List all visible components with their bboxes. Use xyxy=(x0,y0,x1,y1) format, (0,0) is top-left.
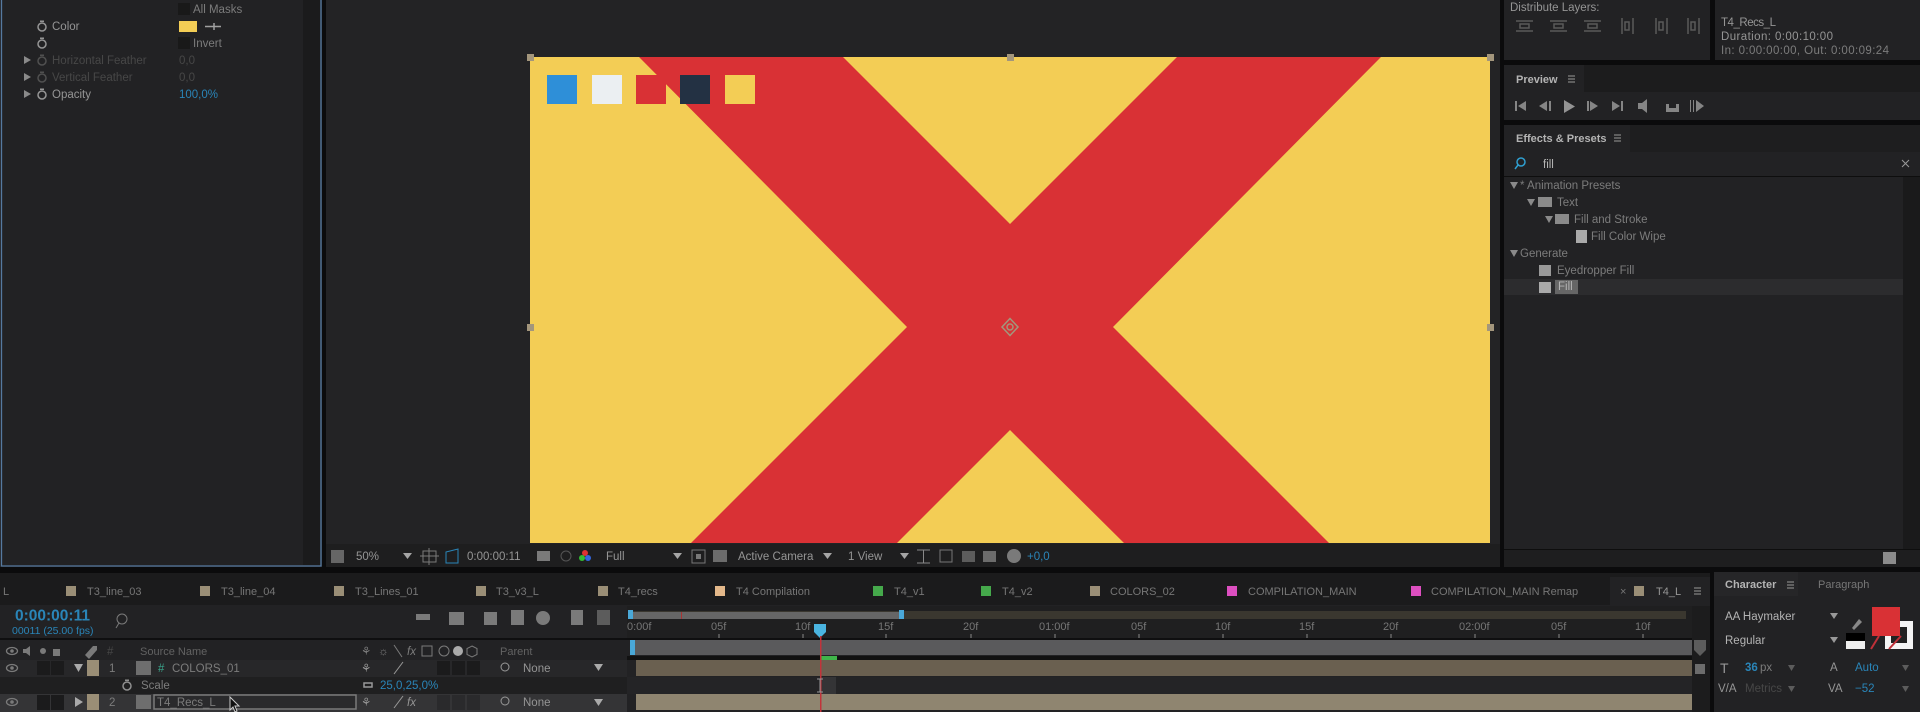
all masks checkbox: All Masks xyxy=(193,4,242,16)
mouse cursor xyxy=(230,697,239,712)
color property: Color xyxy=(52,21,80,33)
viewer toolbar: Full xyxy=(606,551,625,563)
panel: effect controls xyxy=(0,0,322,567)
character metrics: VA xyxy=(1828,683,1843,695)
colour chips xyxy=(1846,607,1913,649)
font selectors: Regular xyxy=(1725,635,1765,647)
scale property row: Scale xyxy=(141,680,170,692)
panel: preview: Preview xyxy=(1516,74,1558,86)
search field xyxy=(1515,158,1909,171)
composition tabs xyxy=(0,573,1710,605)
selection handles xyxy=(527,54,1494,331)
anchor point xyxy=(1002,318,1018,336)
invert checkbox: Invert xyxy=(193,38,223,50)
ruler and navigator: 15f xyxy=(878,621,894,633)
column header: Source Name xyxy=(140,646,207,658)
composition tabs: T3_v3_L xyxy=(496,586,539,598)
vertical feather: Vertical Feather xyxy=(52,72,133,84)
ruler and navigator: 01:00f xyxy=(1039,621,1071,633)
column header: Parent xyxy=(500,646,532,658)
scale property row xyxy=(0,677,1692,694)
current time readout: 0:00:00:11 xyxy=(15,608,90,624)
ruler and navigator: 10f xyxy=(1635,621,1651,633)
composition tabs: T3_line_03 xyxy=(87,586,141,598)
character metrics xyxy=(1718,660,1909,695)
composition tabs: COMPILATION_MAIN xyxy=(1248,586,1357,598)
layer 1 row: # xyxy=(158,663,165,675)
panel: info: T4_Recs_L xyxy=(1721,17,1777,29)
column header xyxy=(0,638,627,659)
column header: # xyxy=(107,646,114,658)
ruler and navigator: 05f xyxy=(1551,621,1567,633)
preset tree: Fill and Stroke xyxy=(1574,214,1648,226)
opacity: Opacity xyxy=(52,89,91,101)
panel: info xyxy=(1715,0,1920,60)
font selectors xyxy=(1725,611,1862,647)
current time readout xyxy=(12,608,127,637)
resize grip xyxy=(1883,552,1896,564)
horizontal feather: 0,0 xyxy=(179,55,195,67)
ruler and navigator: 20f xyxy=(1383,621,1399,633)
panel: info: Duration: 0:00:10:00 xyxy=(1721,31,1833,43)
layer 2 row: T4_Recs_L xyxy=(157,697,216,709)
layer 1 row xyxy=(0,656,1692,677)
invert checkbox xyxy=(38,37,223,50)
preset tree: Text xyxy=(1557,197,1579,209)
panel: info: In: 0:00:00:00, Out: 0:00:09:24 xyxy=(1721,45,1890,57)
character metrics: −52 xyxy=(1855,683,1875,695)
ruler and navigator xyxy=(627,606,1692,660)
composition tabs: T3_Lines_01 xyxy=(355,586,419,598)
composition tabs: T4_recs xyxy=(618,586,658,598)
panel: character xyxy=(1714,572,1920,712)
composition tabs: T4_v1 xyxy=(894,586,925,598)
character metrics: Auto xyxy=(1855,662,1879,674)
character metrics: V/A xyxy=(1718,683,1737,695)
layer 2 row: fx xyxy=(407,697,417,709)
opacity xyxy=(24,88,218,101)
composition tabs: T3_line_04 xyxy=(221,586,275,598)
composition tabs: L xyxy=(3,586,9,598)
scale property row: 25,0,25,0% xyxy=(380,680,438,692)
panel: composition viewer xyxy=(326,0,1500,567)
preset tree: Fill xyxy=(1558,281,1573,293)
viewer toolbar: +0,0 xyxy=(1027,551,1050,563)
layer 1 row: None xyxy=(523,663,550,675)
column header: ☼ xyxy=(378,646,389,658)
character metrics: Metrics xyxy=(1745,683,1782,695)
viewer toolbar xyxy=(326,544,1500,567)
composition tabs: T4 Compilation xyxy=(736,586,810,598)
distribute icons xyxy=(1516,18,1699,34)
viewer toolbar: 0:00:00:11 xyxy=(467,551,521,563)
ruler and navigator: 10f xyxy=(1215,621,1231,633)
layer 2 row: ⚘ xyxy=(361,697,371,709)
composition tabs: COLORS_02 xyxy=(1110,586,1175,598)
preset tree: Generate xyxy=(1520,248,1568,260)
font selectors: AA Haymaker xyxy=(1725,611,1795,623)
horizontal feather: Horizontal Feather xyxy=(52,55,147,67)
composition tabs: × xyxy=(1620,586,1626,598)
opacity: 100,0% xyxy=(179,89,218,101)
vertical feather xyxy=(24,72,195,84)
ruler and navigator: 20f xyxy=(963,621,979,633)
search field: fill xyxy=(1543,159,1554,171)
composition tabs: COMPILATION_MAIN Remap xyxy=(1431,586,1578,598)
viewer toolbar: 50% xyxy=(356,551,379,563)
layer 2 row: 2 xyxy=(109,697,115,709)
vertical feather: 0,0 xyxy=(179,72,195,84)
preset tree xyxy=(1504,180,1903,295)
red x shape xyxy=(639,57,1381,543)
horizontal feather xyxy=(24,54,195,67)
character metrics: T xyxy=(1720,660,1729,676)
ruler and navigator: 10f xyxy=(795,621,811,633)
layer 2 row xyxy=(0,694,1692,712)
preset tree: Eyedropper Fill xyxy=(1557,265,1634,277)
character metrics: A xyxy=(1830,662,1838,674)
composition tabs: T4_v2 xyxy=(1002,586,1033,598)
layer 2 row: None xyxy=(523,697,550,709)
preset tree: Fill Color Wipe xyxy=(1591,231,1666,243)
layer 1 row: 1 xyxy=(109,663,115,675)
playhead xyxy=(814,624,826,712)
composition tabs: T4_L xyxy=(1656,586,1681,598)
column header: fx xyxy=(407,646,417,658)
ruler and navigator: 05f xyxy=(711,621,727,633)
viewer toolbar: 1 View xyxy=(848,551,883,563)
panel: preview xyxy=(1504,65,1920,120)
character metrics: 36 xyxy=(1745,662,1758,674)
timeline toolbar icons xyxy=(416,610,610,625)
playback controls xyxy=(1515,99,1704,113)
current time readout: 00011 (25.00 fps) xyxy=(12,625,94,637)
preset tree: * Animation Presets xyxy=(1520,180,1621,192)
ruler and navigator: 0:00f xyxy=(627,621,652,633)
panel: effects and presets xyxy=(1504,125,1920,567)
ruler and navigator: 15f xyxy=(1299,621,1315,633)
scroll gutter xyxy=(1692,606,1710,712)
layer 1 row: COLORS_01 xyxy=(172,663,240,675)
panel: distribute layers xyxy=(1504,0,1710,60)
panel: character: Character xyxy=(1725,579,1777,591)
panel: distribute layers: Distribute Layers: xyxy=(1510,2,1599,14)
character metrics: px xyxy=(1760,662,1772,674)
layer 1 row: ⚘ xyxy=(361,663,371,675)
panel: character: Paragraph xyxy=(1818,579,1869,591)
ruler and navigator: 05f xyxy=(1131,621,1147,633)
viewer toolbar: Active Camera xyxy=(738,551,814,563)
ruler and navigator: 02:00f xyxy=(1459,621,1491,633)
color property xyxy=(38,20,221,33)
column header: ⚘ xyxy=(361,646,371,658)
panel: timeline xyxy=(0,573,1710,712)
colour swatches xyxy=(547,75,755,104)
panel: effects and presets: Effects & Presets xyxy=(1516,133,1606,145)
composition frame xyxy=(530,57,1490,543)
